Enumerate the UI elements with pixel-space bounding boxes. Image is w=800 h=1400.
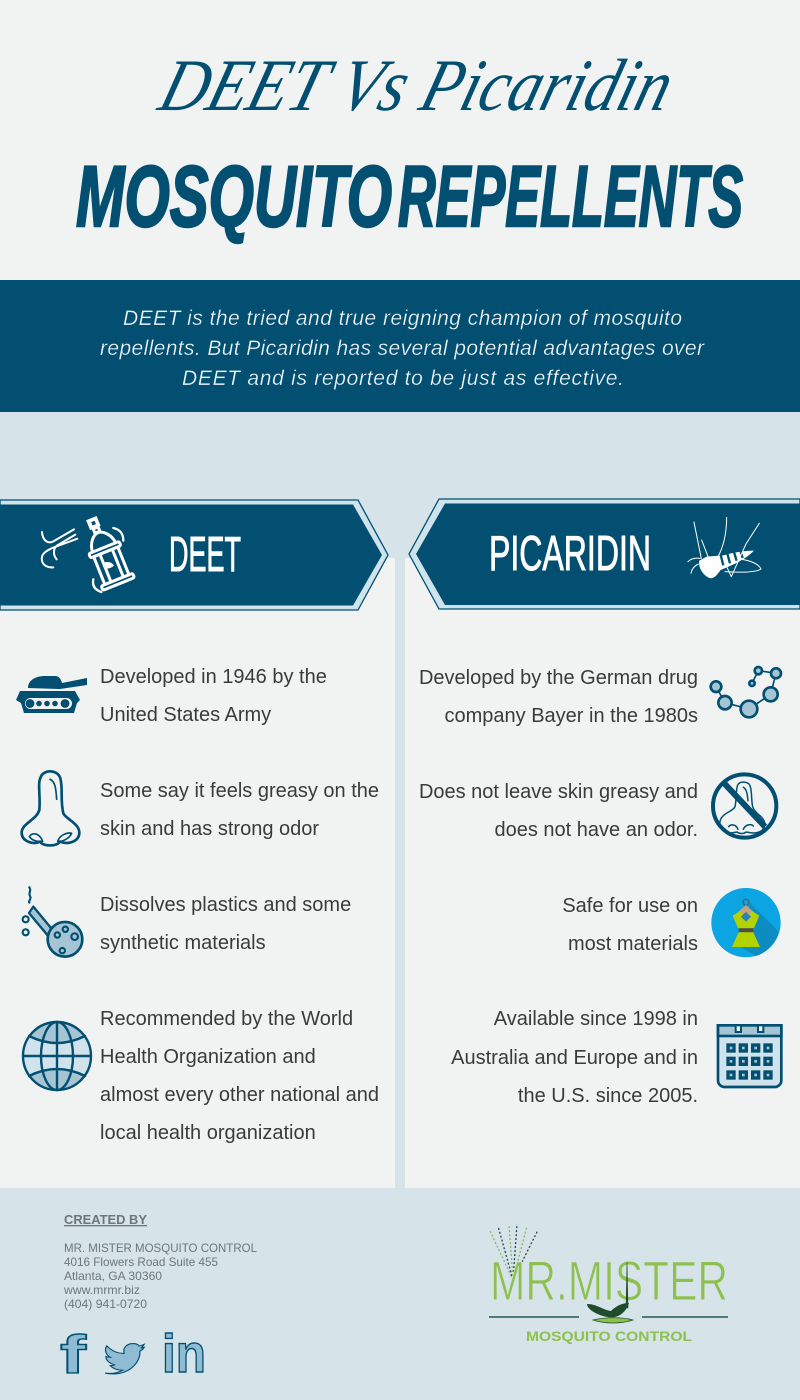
- logo: Mr. Mister Mosquito Control: [489, 1224, 728, 1344]
- logo spray: [490, 1224, 538, 1280]
- logo: Mr. Mister Mosquito Control: MR.MISTER: [490, 1249, 728, 1312]
- panel: intro banner: DEET is the tried and true reigning champion of mosquito: [123, 307, 682, 330]
- heading: Picaridin label: PICARIDIN: [489, 527, 651, 581]
- row: Picaridin availability: Available since 1998 in: [494, 1008, 698, 1030]
- footer: contact details: (404) 941-0720: [64, 1298, 147, 1311]
- row: Picaridin developed: Developed by the German drug: [419, 667, 698, 689]
- row: DEET plastics: Dissolves plastics and some: [100, 894, 351, 916]
- footer: contact details: CREATED BY: [64, 1212, 147, 1227]
- icon: nose: [22, 771, 79, 845]
- panel: intro banner: [0, 280, 800, 412]
- row: DEET plastics: [23, 887, 351, 957]
- heading: DEET label: DEET: [169, 528, 241, 582]
- panel: intro banner: repellents. But Picaridin has several potential advantages over: [100, 337, 705, 360]
- footer: contact details: 4016 Flowers Road Suite 455: [64, 1256, 218, 1269]
- title: DEET Vs Picaridin: DEET Vs Picaridin: [150, 45, 683, 127]
- row: DEET recommended: local health organization: [100, 1122, 316, 1144]
- footer: contact details: [63, 1212, 258, 1311]
- row: DEET recommended: almost every other national and: [100, 1084, 379, 1106]
- row: Picaridin availability: Australia and Europe and in: [451, 1047, 698, 1069]
- header: DEET: [0, 500, 388, 610]
- row: Picaridin availability: the U.S. since 2005.: [518, 1085, 698, 1107]
- icon: molecule: [711, 667, 781, 717]
- icons: social media: [60, 1324, 206, 1385]
- panel: DEET column: [0, 558, 395, 1188]
- logo: Mr. Mister Mosquito Control: MOSQUITO CONTROL: [526, 1328, 692, 1344]
- icon: crossed nose: [713, 774, 776, 838]
- row: DEET recommended: Recommended by the World: [100, 1008, 353, 1030]
- footer: contact details: MR. MISTER MOSQUITO CONTROL: [64, 1242, 258, 1255]
- icon: mosquito: [688, 517, 761, 578]
- row: Picaridin no grease: does not have an odor.: [494, 819, 698, 841]
- footer: contact details: www.mrmr.biz: [63, 1284, 140, 1297]
- row: Picaridin no grease: [419, 774, 776, 841]
- row: Picaridin materials: [562, 888, 781, 957]
- row: DEET greasy: [22, 771, 379, 845]
- row: Picaridin availability: [451, 1008, 781, 1107]
- icon: tank: [16, 676, 87, 713]
- row: DEET developed: Developed in 1946 by the: [100, 666, 327, 688]
- row: DEET plastics: synthetic materials: [100, 932, 266, 954]
- row: DEET recommended: Health Organization and: [100, 1046, 316, 1068]
- icon: linkedin: in: [162, 1324, 206, 1384]
- heading: Mosquito Repellents: MOSQUITO: [76, 149, 392, 245]
- row: Picaridin materials: most materials: [568, 933, 698, 955]
- icon: facebook: f: [60, 1325, 87, 1385]
- row: DEET developed: United States Army: [100, 704, 271, 726]
- panel: intro banner: DEET and is reported to be just as effective.: [182, 367, 624, 390]
- row: Picaridin developed: [419, 667, 781, 727]
- row: DEET recommended: [23, 1008, 379, 1144]
- icon: dress: [711, 888, 781, 957]
- footer: contact details: Atlanta, GA 30360: [64, 1270, 162, 1283]
- logo mosquito: [587, 1262, 633, 1323]
- row: Picaridin no grease: Does not leave skin greasy and: [419, 781, 698, 803]
- row: Picaridin materials: Safe for use on: [562, 895, 698, 917]
- panel: Picaridin column: [405, 558, 800, 1188]
- icon: flask: [23, 887, 82, 957]
- icon: spray can: [42, 511, 134, 592]
- row: DEET greasy: Some say it feels greasy on the: [100, 780, 379, 802]
- icon: twitter: [105, 1344, 144, 1374]
- row: Picaridin developed: company Bayer in the 1980s: [444, 705, 698, 727]
- heading: Mosquito Repellents: [76, 149, 743, 245]
- row: DEET developed: [16, 666, 327, 726]
- icon: calendar: [718, 1025, 781, 1087]
- icon: globe: [23, 1021, 91, 1091]
- header: Picaridin: [409, 499, 800, 609]
- row: DEET greasy: skin and has strong odor: [100, 818, 319, 840]
